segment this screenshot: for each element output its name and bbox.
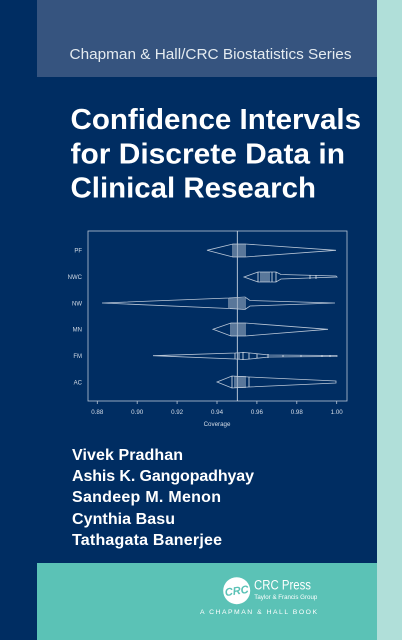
violin: AC bbox=[217, 376, 336, 388]
plot frame bbox=[88, 231, 347, 401]
chart: coverage violin plot bbox=[88, 231, 347, 404]
icon: CRC logo: CRC bbox=[224, 584, 250, 599]
authors: Vivek Pradhan bbox=[72, 447, 183, 464]
violin: PF bbox=[207, 244, 336, 257]
row labels: AC bbox=[74, 380, 83, 386]
imprint: A CHAPMAN & HALL BOOK bbox=[200, 609, 317, 616]
axis tick labels bbox=[91, 409, 343, 416]
row labels bbox=[68, 248, 83, 386]
authors: Ashis K. Gangopadhyay bbox=[72, 468, 254, 485]
violin: FM bbox=[153, 352, 337, 360]
title bbox=[70, 104, 361, 204]
axis tick labels: 1.00 bbox=[331, 409, 343, 416]
row labels: NWC bbox=[68, 275, 83, 281]
row labels: FM bbox=[73, 354, 82, 360]
violin: NW bbox=[102, 297, 335, 310]
authors: Sandeep M. Menon bbox=[72, 489, 221, 506]
publisher name: CRC Press bbox=[254, 578, 311, 592]
title: for Discrete Data in bbox=[70, 138, 345, 170]
axis tick labels: 0.88 bbox=[91, 409, 104, 416]
x axis ticks bbox=[97, 401, 337, 404]
publisher band bbox=[37, 563, 377, 640]
title: Clinical Research bbox=[70, 172, 316, 204]
series banner bbox=[37, 0, 377, 77]
publisher tagline: Taylor & Francis Group bbox=[254, 594, 318, 601]
title: Confidence Intervals bbox=[70, 104, 361, 136]
axis tick labels: 0.94 bbox=[211, 409, 224, 416]
icon: CRC logo bbox=[223, 577, 250, 604]
axis tick labels: 0.90 bbox=[131, 409, 144, 416]
series title: Chapman & Hall/CRC Biostatistics Series bbox=[70, 46, 352, 63]
authors bbox=[72, 447, 254, 549]
violin: NWC bbox=[244, 272, 337, 282]
axis title: Coverage bbox=[204, 421, 231, 428]
axis tick labels: 0.96 bbox=[251, 409, 263, 416]
row labels: NW bbox=[72, 302, 82, 308]
row labels: PF bbox=[74, 248, 82, 254]
authors: Cynthia Basu bbox=[72, 511, 175, 528]
reference line bbox=[236, 231, 238, 401]
axis tick labels: 0.98 bbox=[291, 409, 303, 416]
right spine strip bbox=[377, 0, 402, 640]
authors: Tathagata Banerjee bbox=[72, 532, 222, 549]
violin: MN bbox=[213, 323, 328, 336]
axis tick labels: 0.92 bbox=[171, 409, 184, 416]
row labels: MN bbox=[73, 328, 82, 334]
